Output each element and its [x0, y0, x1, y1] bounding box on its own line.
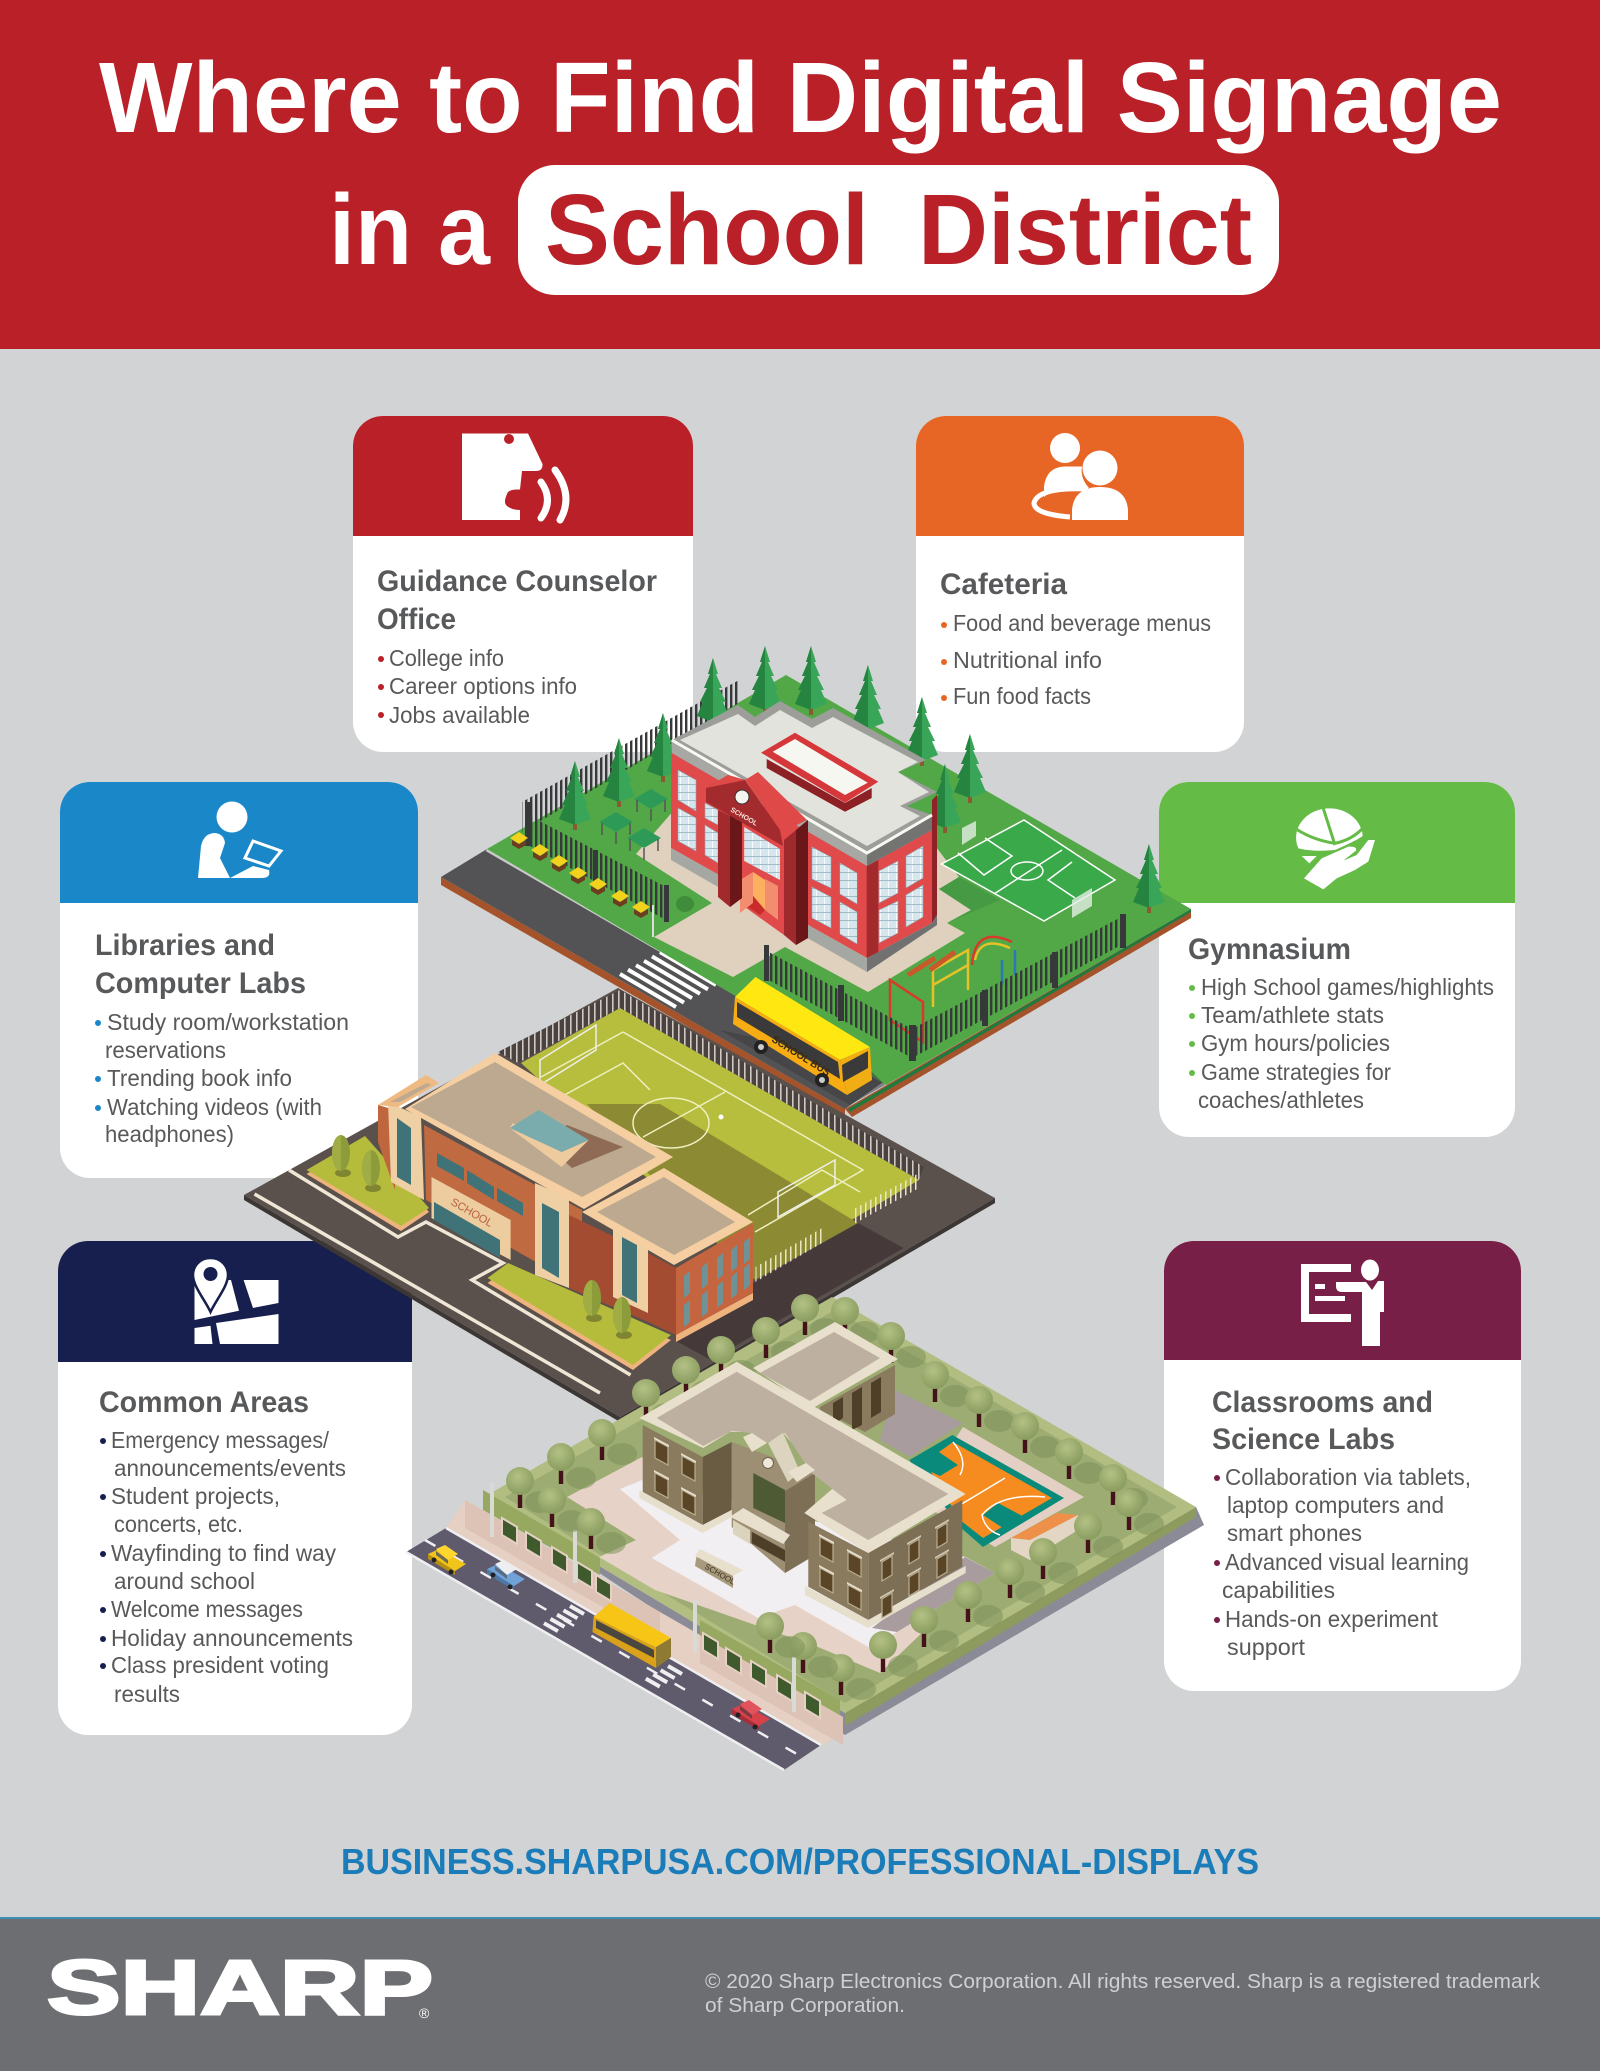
bullet list: Jobs available: [389, 702, 530, 728]
rear wing: [753, 1322, 898, 1432]
bullet list: [378, 645, 577, 728]
entrance sign: [695, 1549, 743, 1588]
bullet list: capabilities: [1222, 1577, 1335, 1603]
flower beds: [510, 832, 650, 918]
bullet list: Collaboration via tablets,: [1225, 1464, 1471, 1490]
bullet list: Welcome messages: [111, 1596, 303, 1622]
panel: guidance counselor office: [353, 416, 693, 752]
lawn: [487, 675, 1191, 1117]
pale front fence: [756, 1173, 919, 1282]
field fence back: [498, 990, 924, 1180]
road markings: [254, 1170, 630, 1393]
building walls: SCHOOL: [448, 1196, 495, 1230]
bullet list: [941, 610, 1211, 709]
icon: people: [1034, 433, 1128, 520]
heading: Classrooms and: [1212, 1386, 1433, 1419]
heading: Gymnasium: [1188, 933, 1351, 966]
logo: sharp: ®: [419, 2005, 430, 2021]
bullet list: smart phones: [1227, 1520, 1362, 1546]
bullet list: Hands-on experiment: [1225, 1606, 1438, 1632]
soccer pitch: [521, 1008, 919, 1280]
school portico: [706, 772, 808, 945]
school bus: [720, 977, 885, 1105]
bullet list: concerts, etc.: [114, 1511, 243, 1537]
heading: Guidance Counselor: [377, 565, 657, 598]
bullet list: Study room/workstation: [107, 1009, 349, 1035]
icon: teacher at board: [1301, 1260, 1384, 1346]
bullet list: Wayfinding to find way: [111, 1540, 336, 1566]
main building walls: [639, 1425, 966, 1628]
bullet list: [1214, 1464, 1471, 1660]
entrance sign: SCHOOL: [703, 1562, 737, 1587]
bullet list: reservations: [105, 1037, 226, 1063]
bullet list: Student projects,: [111, 1483, 280, 1509]
bullet list: Game strategies for: [1201, 1059, 1391, 1085]
lawns: [306, 1136, 671, 1370]
copyright: © 2020 Sharp Electronics Corporation. All rights reserved. Sharp is a registered trademark: [705, 1971, 1541, 1993]
building roofs: [378, 1053, 753, 1265]
trees behind school: [559, 646, 986, 833]
icon: ball in hand: [1296, 803, 1375, 889]
school walls: [671, 750, 937, 972]
bullet list: College info: [389, 645, 504, 671]
icon: speaking head: [462, 434, 566, 520]
title highlight pill: District: [918, 174, 1252, 286]
main roof: [639, 1362, 966, 1553]
icon: map with pin: [193, 1258, 278, 1344]
school portico: SCHOOL: [729, 807, 759, 828]
bullet list: Trending book info: [107, 1065, 292, 1091]
building walls: [378, 1105, 753, 1342]
building pilasters: [388, 1102, 648, 1313]
title banner: [0, 0, 1600, 349]
bullet list: results: [114, 1681, 180, 1707]
bullet list: support: [1227, 1634, 1305, 1660]
red car: [732, 1700, 770, 1730]
website url: BUSINESS.SHARPUSA.COM/PROFESSIONAL-DISPLAYS: [341, 1841, 1259, 1882]
heading: Cafeteria: [940, 568, 1067, 601]
bullet list: around school: [114, 1568, 255, 1594]
yellow taxi: [428, 1545, 466, 1575]
footer: [0, 1917, 1600, 2071]
bullet list: Fun food facts: [953, 683, 1091, 709]
back trees: [632, 1294, 926, 1425]
panel: libraries and computer labs: [60, 782, 418, 1178]
panel: libraries and computer labs: Computer Labs: [95, 967, 306, 1000]
bullet list: Nutritional info: [953, 647, 1102, 673]
corner pine: [1133, 844, 1165, 913]
basketball court: [910, 1435, 1078, 1560]
boundary wall, hedge and fence: [465, 1483, 843, 1745]
road: [441, 849, 886, 1117]
school bus: SCHOOL BUS: [769, 1034, 832, 1079]
bullet list: [95, 1009, 349, 1147]
illustration: beige school with basketball court: [406, 1294, 1204, 1770]
plaza paths: [567, 1390, 1084, 1673]
title line 1: Where to Find Digital Signage: [99, 42, 1502, 154]
bullet list: Gym hours/policies: [1201, 1030, 1390, 1056]
logo: sharp: SHARP: [47, 1945, 433, 2031]
bullet list: Watching videos (with: [107, 1094, 322, 1120]
title line 2 prefix: in a: [329, 174, 491, 286]
ping pong tables: [599, 789, 668, 860]
panel: cafeteria: [916, 416, 1244, 752]
bullet list: Emergency messages/: [111, 1427, 329, 1453]
panel: classrooms and science labs: Science Labs: [1212, 1423, 1395, 1456]
police car: [487, 1560, 525, 1590]
title highlight pill: School: [545, 174, 869, 286]
icon: person with tablet: [198, 802, 281, 878]
bullet list: laptop computers and: [1227, 1492, 1444, 1518]
bullet list: [1189, 974, 1494, 1113]
bullet list: announcements/events: [114, 1455, 346, 1481]
panel: guidance counselor office: Office: [377, 603, 456, 636]
school bus on road: [592, 1603, 671, 1668]
illustration: red brick school: [441, 646, 1191, 1117]
bullet list: Class president voting: [111, 1652, 329, 1678]
soccer field: [942, 820, 1115, 921]
back fence: [522, 680, 739, 832]
bullet list: headphones): [105, 1121, 234, 1147]
sidewalk and road: [406, 1500, 843, 1770]
cypress trees: [332, 1135, 632, 1339]
bullet list: Team/athlete stats: [1201, 1002, 1384, 1028]
panel: classrooms and science labs: [1164, 1241, 1521, 1691]
school windows: [678, 770, 923, 944]
grounds: [484, 1297, 1204, 1735]
bullet list: coaches/athletes: [1198, 1087, 1364, 1113]
playground: [890, 937, 1015, 1042]
heading: Common Areas: [99, 1386, 309, 1419]
shrub and lamp: [653, 896, 694, 937]
title highlight pill: [518, 165, 1279, 295]
copyright: of Sharp Corporation.: [705, 1995, 905, 2017]
panel: common areas: [58, 1241, 412, 1735]
bullet list: Food and beverage menus: [953, 610, 1211, 636]
bullet list: Advanced visual learning: [1225, 1549, 1469, 1575]
panel: gymnasium: [1159, 782, 1515, 1137]
side fence: [525, 802, 669, 922]
copyright: [705, 1971, 1541, 2017]
school roof: [672, 701, 937, 866]
front fence: [764, 914, 1126, 1061]
logo: sharp: [47, 1945, 433, 2031]
bullet list: Holiday announcements: [111, 1625, 353, 1651]
front trees: [506, 1361, 1164, 1700]
platform: [244, 988, 995, 1422]
bullet list: High School games/highlights: [1201, 974, 1494, 1000]
bullet list: [100, 1427, 353, 1707]
heading: Libraries and: [95, 929, 275, 962]
bullet list: Career options info: [389, 673, 577, 699]
illustration: terracotta school with soccer field: [244, 988, 995, 1422]
